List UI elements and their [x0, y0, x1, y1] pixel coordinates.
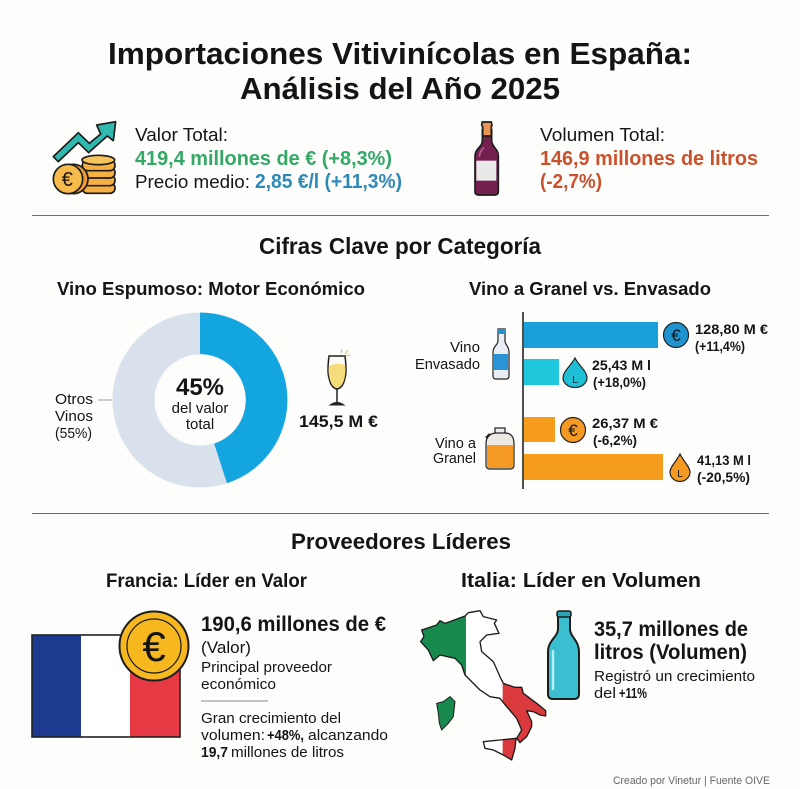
- value: 128,80 M €: (+11,4%): [695, 338, 745, 354]
- label: vino envasado: Envasado: [415, 356, 480, 373]
- label: otros vinos: [55, 391, 112, 442]
- heading: cifras clave: Cifras Clave por Categoría: [259, 233, 541, 259]
- subheading: francia: Francia: Líder en Valor: [106, 571, 308, 592]
- panel: francia: [32, 571, 388, 761]
- value: 128,80 M €: [695, 321, 768, 354]
- title: Importaciones Vitivinícolas en España:: [108, 36, 692, 71]
- icon: wine bottle: [475, 122, 498, 195]
- label: vino a granel: Vino a: [435, 435, 477, 452]
- icon: teal bottle: [548, 611, 579, 699]
- title: [108, 36, 692, 106]
- value: 25,43 M l: 25,43 M l: [592, 357, 651, 373]
- text: francia: [201, 613, 388, 761]
- value: 26,37 M €: (-6,2%): [593, 432, 637, 448]
- label: otros vinos: (55%): [55, 425, 92, 442]
- text: valor total: 2,85 €/l (+11,3%): [255, 171, 402, 193]
- icon: euro coin orange: €: [568, 421, 578, 440]
- label: otros vinos: Otros: [55, 391, 93, 408]
- text: francia: económico: [201, 676, 276, 693]
- icon: euro coin blue: [664, 322, 688, 348]
- donut centre label: [172, 374, 228, 433]
- icon: rising arrow and coins: €: [62, 169, 73, 191]
- icon: euro coin orange: [560, 418, 586, 442]
- value: 26,37 M €: 26,37 M €: [592, 415, 658, 431]
- label: vino a granel: [433, 435, 477, 467]
- text: francia: 19,7: [201, 744, 228, 761]
- icon: french flag: [32, 635, 180, 737]
- panel: granel vs envasado: [415, 279, 768, 489]
- icon: small bottle: [493, 329, 509, 379]
- value: 26,37 M €: [592, 415, 658, 448]
- icon: champagne glass: [328, 349, 350, 405]
- panel: volumen total: [475, 122, 758, 195]
- label: vino envasado: [415, 339, 480, 373]
- text: valor total: Precio medio:: [135, 172, 250, 192]
- panel: vino espumoso: [55, 279, 379, 483]
- text: francia: Principal proveedor: [201, 659, 332, 676]
- icon: rising arrow and coins: [53, 122, 116, 194]
- donut centre label: del valor: [172, 400, 228, 417]
- subheading: italia: Italia: Líder en Volumen: [461, 570, 701, 592]
- text: italia: [594, 618, 755, 702]
- panel: italia: [413, 570, 755, 763]
- text: italia: Registró un crecimiento: [594, 668, 755, 685]
- value: 25,43 M l: [592, 357, 651, 390]
- footer credit: Creado por Vinetur | Fuente OIVE: [613, 775, 770, 787]
- value: 145,5 M €: 145,5 M €: [299, 412, 379, 431]
- icon: map of Italy: [420, 610, 546, 761]
- icon: drop cyan: L: [572, 375, 578, 386]
- donut centre label: 45%: [176, 374, 224, 401]
- text: francia: Gran crecimiento del: [201, 710, 341, 727]
- text: valor total: [135, 125, 402, 193]
- value: 128,80 M €: 128,80 M €: [695, 321, 768, 337]
- icon: gold euro coin: [120, 612, 188, 680]
- panel: valor total: [53, 122, 402, 194]
- text: francia: +48%,: [267, 727, 304, 744]
- text: italia: 35,7 millones de: [594, 618, 748, 641]
- text: volumen total: 146,9 millones de litros: [540, 148, 758, 170]
- text: francia: (Valor): [201, 638, 251, 657]
- icon: bulk jug: [486, 428, 514, 469]
- label: otros vinos: Vinos: [55, 408, 93, 425]
- icon: drop cyan: [563, 358, 587, 388]
- text: francia: volumen:: [201, 727, 265, 744]
- value: 41,13 M l: [697, 452, 751, 485]
- donut chart: [134, 312, 287, 483]
- value: 25,43 M l: (+18,0%): [593, 374, 646, 390]
- text: italia: del: [594, 685, 616, 702]
- text: francia: millones de litros: [231, 744, 344, 761]
- subheading: vino espumoso: Vino Espumoso: Motor Económico: [57, 279, 365, 299]
- value: 41,13 M l: 41,13 M l: [697, 452, 751, 468]
- icon: drop orange: L: [677, 469, 683, 480]
- label: vino a granel: Granel: [433, 450, 476, 467]
- icon: gold euro coin: €: [142, 623, 166, 670]
- subheading: granel vs envasado: Vino a Granel vs. Envasado: [469, 279, 711, 299]
- bar chart: [523, 312, 663, 489]
- heading: proveedores líderes: Proveedores Líderes: [291, 529, 511, 554]
- text: francia: alcanzando: [308, 727, 388, 744]
- text: francia: 190,6 millones de €: [201, 613, 386, 636]
- text: volumen total: [540, 125, 758, 193]
- label: vino envasado: Vino: [450, 339, 480, 356]
- icon: euro coin blue: €: [671, 326, 681, 345]
- value: 41,13 M l: (-20,5%): [697, 469, 750, 485]
- text: valor total: 419,4 millones de € (+8,3%): [135, 148, 392, 170]
- donut centre label: total: [186, 416, 214, 433]
- text: italia: +11%: [619, 685, 647, 702]
- title: Análisis del Año 2025: [240, 71, 560, 106]
- text: valor total: Valor Total:: [135, 125, 228, 145]
- icon: drop orange: [670, 454, 690, 482]
- text: italia: litros (Volumen): [594, 641, 747, 664]
- text: volumen total: (-2,7%): [540, 171, 602, 193]
- text: volumen total: Volumen Total:: [540, 125, 665, 145]
